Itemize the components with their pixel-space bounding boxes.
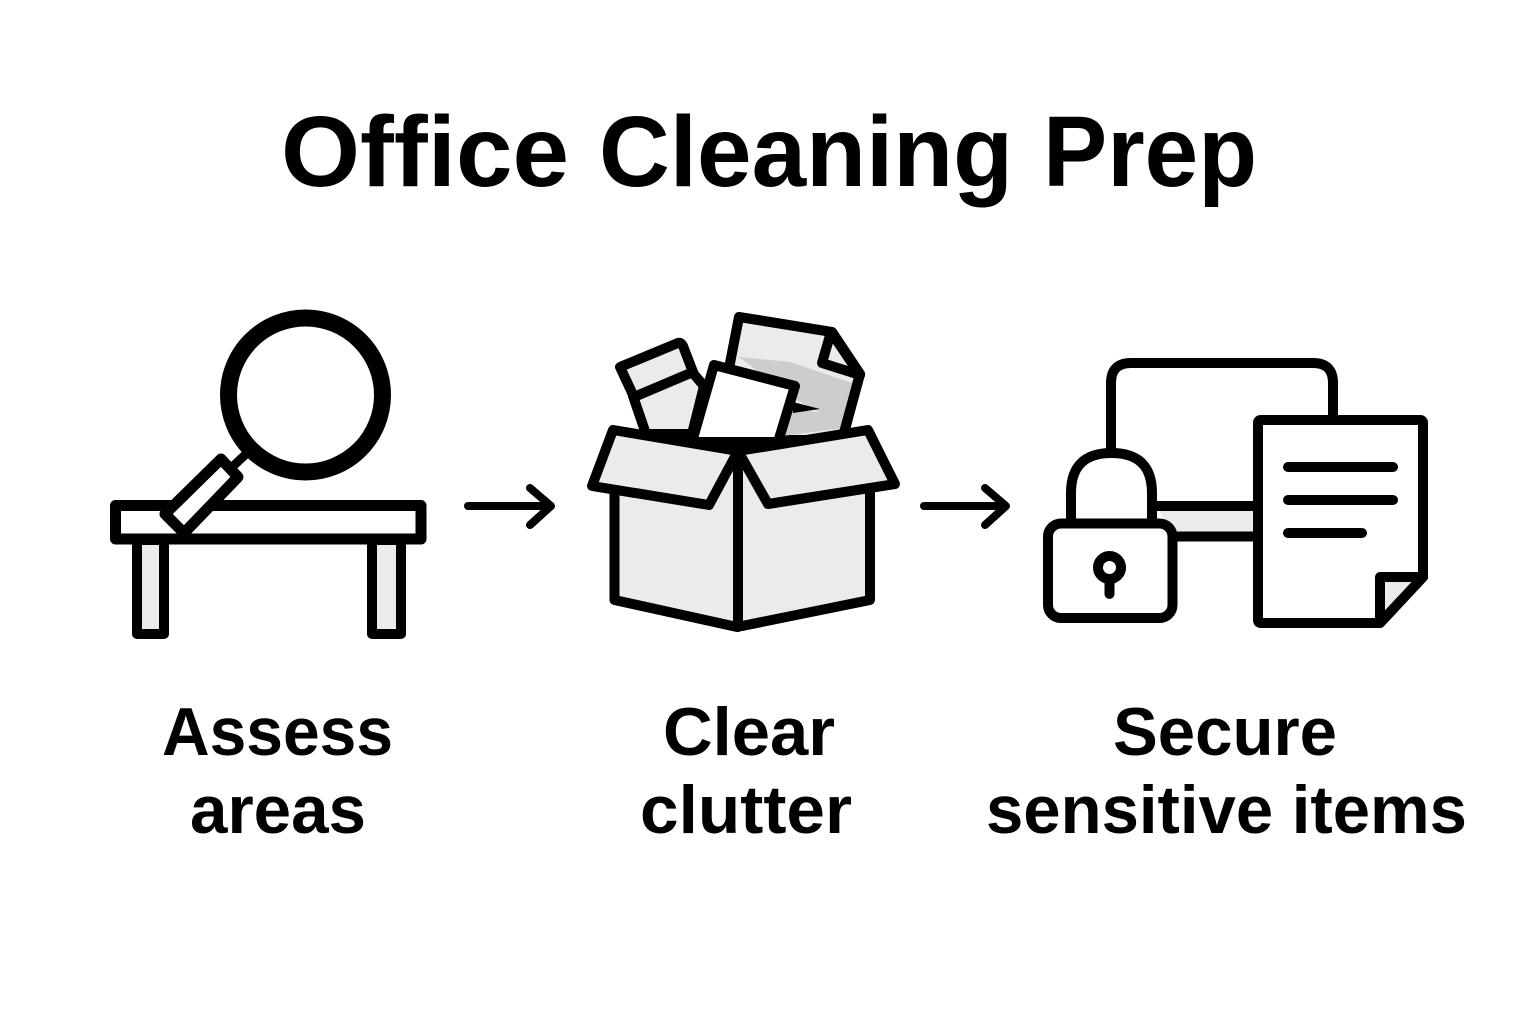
label: clear clutter bbox=[640, 694, 852, 848]
icon: magnifier over desk bbox=[116, 318, 421, 634]
left flap bbox=[592, 430, 738, 505]
label: secure sensitive items bbox=[986, 694, 1467, 848]
document bbox=[1258, 420, 1423, 623]
title: Cleaning bbox=[599, 96, 1013, 208]
label: clear clutter: clutter bbox=[640, 772, 852, 848]
title: Office bbox=[281, 96, 569, 208]
front document bbox=[692, 365, 820, 442]
padlock bbox=[1048, 453, 1172, 618]
label: secure sensitive items: Secure bbox=[1113, 694, 1337, 770]
title: Prep bbox=[1043, 96, 1257, 208]
label: clear clutter: Clear bbox=[663, 694, 835, 770]
icon: cluttered box bbox=[592, 317, 895, 627]
small carton bbox=[620, 343, 704, 434]
box body bbox=[614, 450, 870, 627]
title bbox=[281, 96, 1257, 208]
label: secure sensitive items: sensitive items bbox=[986, 772, 1467, 848]
label: assess areas bbox=[162, 694, 393, 848]
icon: locked laptop and document bbox=[1048, 363, 1423, 623]
label: assess areas: areas bbox=[190, 772, 366, 848]
label: assess areas: Assess bbox=[162, 694, 393, 770]
laptop bbox=[1111, 363, 1333, 450]
back document bbox=[715, 317, 860, 440]
arrow: assess to clear bbox=[468, 488, 551, 525]
arrow: clear to secure bbox=[924, 488, 1006, 525]
right flap bbox=[738, 430, 895, 504]
